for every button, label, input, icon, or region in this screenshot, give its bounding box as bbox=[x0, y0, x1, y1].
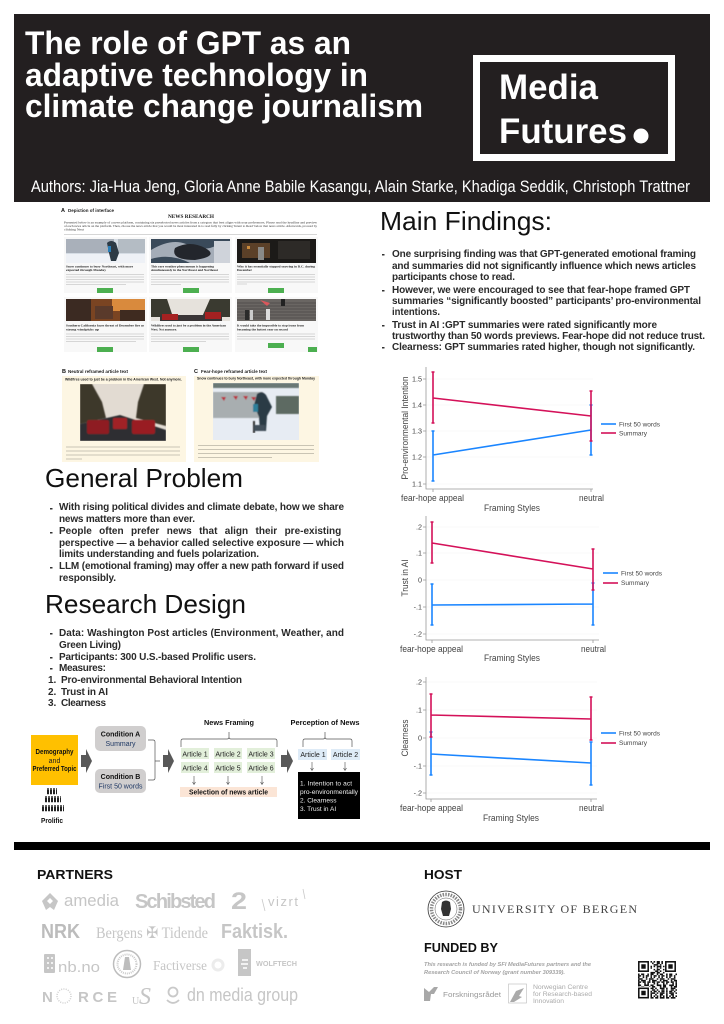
chart: clearness: fear-hope appeal bbox=[400, 803, 463, 813]
logo: University of Bergen bbox=[428, 891, 637, 927]
card headlines: becoming the hottest year on record bbox=[237, 328, 288, 332]
text block: general problem bullets: responsibly. bbox=[59, 573, 116, 584]
card headlines: simultaneously in the Northwest and Northeast bbox=[151, 268, 219, 272]
card headlines: strong windpicks up bbox=[66, 328, 99, 332]
logo: Norwegian Centre for Research-based Innovation: Innovation bbox=[533, 998, 565, 1005]
chart: clearness: .1 bbox=[416, 706, 422, 714]
logo: Norwegian Centre for Research-based Innovation: for Research-based bbox=[533, 991, 593, 998]
label: Prolific: Prolific bbox=[41, 818, 63, 825]
figure C: fear-hope reframed article: C bbox=[194, 369, 198, 375]
text block: general problem bullets bbox=[50, 502, 344, 584]
image: snow shoveller bbox=[66, 239, 145, 263]
figure C: fear-hope reframed article bbox=[194, 369, 319, 462]
title: adaptive technology in bbox=[25, 57, 368, 93]
card headlines: December bbox=[237, 268, 253, 272]
box: condition B: Condition B bbox=[101, 774, 140, 781]
chart: trust in AI: Framing Styles bbox=[484, 653, 541, 663]
image: fire trucks on road bbox=[80, 384, 166, 441]
text block: general problem bullets: limits understanding and fuels polarization. bbox=[59, 549, 259, 560]
figure B: neutral reframed article bbox=[62, 369, 186, 462]
logo: University of Bergen: UNIVERSITY OF BERGEN bbox=[472, 902, 637, 916]
logo: university seal bbox=[114, 950, 140, 978]
logo: Forskningsrådet bbox=[424, 987, 502, 1001]
card headlines: Snow continues to bury Northeast, with more bbox=[66, 264, 133, 268]
figure A: depiction of interface: A bbox=[61, 208, 65, 214]
chart: pro-environmental intention: Pro-environmental Intention bbox=[400, 376, 410, 480]
text block: main findings bullets: trustworthy than 50 words previews. Fear-hope did not reduce trust. bbox=[392, 331, 705, 342]
title: The role of GPT as an bbox=[25, 25, 351, 61]
figure C: fear-hope reframed article: Snow continues to bury Northeast, with more expected through Monday bbox=[197, 376, 316, 380]
box: demography and preferred topic bbox=[31, 735, 78, 785]
card headlines: It would take the impossible to stop irony from bbox=[237, 324, 304, 328]
logo: Bergens Tidende: Bergens ✠ Tidende bbox=[96, 925, 208, 942]
chart: trust in AI: -.1 bbox=[414, 602, 422, 612]
chart: pro-environmental intention: 1.1 bbox=[412, 480, 422, 488]
legend bbox=[601, 422, 660, 438]
chart: pro-environmental intention bbox=[400, 367, 660, 513]
chart: clearness: Framing Styles bbox=[483, 813, 540, 823]
logo: Wolftech bbox=[238, 949, 297, 976]
article grid: Article 1 bbox=[182, 752, 208, 758]
heading: General Problem: General Problem bbox=[45, 463, 243, 493]
logo: Forskningsrådet: Forskningsrådet bbox=[443, 990, 502, 999]
box: demography and preferred topic: and bbox=[49, 758, 60, 765]
chart: clearness: Clearness bbox=[400, 719, 410, 756]
box: selection of news article: Selection of news article bbox=[189, 790, 268, 796]
text block: main findings bullets: One surprising finding was that GPT-generated emotional framing bbox=[392, 249, 696, 260]
card headlines: Wildfires used to just be a problem in the American bbox=[151, 324, 226, 328]
article grid: Article 5 bbox=[215, 766, 241, 772]
image: fire trucks bbox=[151, 299, 230, 321]
logo: vizrt bbox=[262, 889, 305, 911]
logo: TV 2: 2 bbox=[231, 888, 247, 915]
heading: Main Findings: Main Findings: bbox=[380, 206, 552, 236]
legend bbox=[601, 730, 660, 747]
figure A: depiction of interface: Depiction of interface bbox=[68, 208, 114, 214]
logo: dn media group: dn media group bbox=[187, 985, 298, 1005]
card headlines: Southern California faces threat of December fire as bbox=[66, 324, 145, 328]
text block: research design list: Pro-environmental Behavioral Intention bbox=[61, 675, 242, 686]
perception articles bbox=[298, 749, 360, 760]
text block: general problem bullets: LLM (emotional framing) may offer a new path forward if used bbox=[59, 561, 344, 572]
arrow: to perception bbox=[281, 749, 293, 773]
text block: research design list: 2. bbox=[48, 687, 57, 698]
logo: Wolftech: WOLFTECH bbox=[256, 959, 297, 968]
logo: UiS: S bbox=[139, 984, 151, 1010]
image: person shovelling snow bbox=[213, 383, 299, 440]
logo: NORCE: RCE bbox=[78, 989, 117, 1006]
logo: nb.no: nb.no bbox=[58, 959, 100, 976]
chart: clearness: -.2 bbox=[414, 788, 422, 798]
legend: Summary bbox=[619, 430, 648, 438]
logo: Media Futures bbox=[476, 58, 672, 158]
text block: research design list: Data: Washington Post articles (Environment, Weather, and bbox=[59, 628, 344, 639]
box: condition B: First 50 words bbox=[99, 784, 143, 790]
funding statement: Research Council of Norway (grant number 309339). bbox=[424, 970, 565, 976]
chart: pro-environmental intention: 1.4 bbox=[412, 400, 422, 410]
perception articles: Article 1 bbox=[300, 752, 326, 759]
text block: research design list: Clearness bbox=[61, 698, 106, 709]
text block: main findings bullets: However, we were encouraged to see that fear-hope framed GPT bbox=[392, 285, 690, 296]
logo: NORCE: N bbox=[42, 989, 53, 1006]
logo: nb.no bbox=[44, 954, 100, 976]
title bbox=[25, 25, 423, 124]
heading: Research Design: Research Design bbox=[45, 589, 246, 619]
logo: vizrt: vizrt bbox=[268, 894, 298, 909]
figure A: depiction of interface: Presented below is an example of a news platform, containing six preselected news articles from a category that best aligns with your preferences. Please read the headline and preview bbox=[64, 220, 318, 226]
article grid: Article 6 bbox=[248, 766, 274, 772]
chart: trust in AI: neutral bbox=[581, 644, 606, 654]
text block: general problem bullets: People often prefer news that align their pre-existing bbox=[59, 526, 341, 537]
chart: clearness: neutral bbox=[579, 803, 604, 813]
article cards bbox=[64, 237, 318, 352]
perception articles: Article 2 bbox=[333, 752, 358, 759]
legend: First 50 words bbox=[621, 570, 662, 578]
logo: amedia: amedia bbox=[64, 891, 120, 910]
logo: Norwegian Centre for Research-based Innovation: Norwegian Centre bbox=[533, 984, 589, 991]
chart: clearness: .2 bbox=[416, 678, 422, 686]
box: outcome measures: 2. Clearness bbox=[300, 798, 337, 804]
text block: general problem bullets: perspective — a behavior called selective exposure — which bbox=[59, 538, 344, 549]
funding statement bbox=[424, 962, 592, 976]
chart: clearness bbox=[400, 677, 660, 823]
logo: Media Futures: Futures bbox=[499, 112, 627, 151]
chart: pro-environmental intention: fear-hope appeal bbox=[401, 493, 464, 503]
article grid: Article 2 bbox=[215, 752, 241, 758]
image: wildfire bbox=[66, 299, 145, 321]
chart: trust in AI: fear-hope appeal bbox=[400, 644, 463, 654]
text block: general problem bullets: news matters more than ever. bbox=[59, 514, 195, 525]
text block: main findings bullets: participants chose to read. bbox=[392, 272, 515, 283]
box: selection of news article bbox=[180, 787, 277, 797]
logo: Faktisk: Faktisk. bbox=[221, 921, 288, 943]
logo: NRK: NRK bbox=[41, 921, 80, 943]
card headlines: Why it has essentially stopped snowing in D.C. during bbox=[237, 264, 315, 268]
text block: research design list: 3. bbox=[48, 698, 57, 709]
figure B: neutral reframed article: B bbox=[62, 369, 66, 375]
box: outcome measures bbox=[298, 772, 360, 819]
card headlines: expected through Monday bbox=[66, 268, 106, 272]
chart: pro-environmental intention: 1.2 bbox=[412, 452, 422, 462]
logo: UiS bbox=[132, 984, 151, 1010]
read buttons bbox=[97, 288, 317, 352]
header banner bbox=[14, 14, 710, 202]
article grid: Article 3 bbox=[248, 752, 274, 758]
QR code bbox=[638, 961, 677, 999]
chart: trust in AI: Trust in AI bbox=[400, 560, 410, 596]
text block: research design list: 1. bbox=[48, 675, 57, 686]
figure A: depiction of interface: NEWS RESEARCH bbox=[168, 214, 215, 220]
text block: main findings bullets: and summaries did not significantly influence which news articles bbox=[392, 261, 696, 272]
figure B: neutral reframed article: Wildfires used to just be a problem in the American West. Not anymore. bbox=[65, 378, 182, 382]
image: steps with umbrella bbox=[237, 299, 316, 321]
partner logos bbox=[41, 888, 305, 1010]
logo: Norwegian Centre for Research-based Innovation bbox=[508, 984, 593, 1005]
box: condition A bbox=[95, 726, 146, 751]
chart: trust in AI: 0 bbox=[418, 576, 422, 584]
legend: Summary bbox=[619, 740, 648, 747]
text block: research design list: Participants: 300 U.S.-based Prolific users. bbox=[59, 652, 256, 663]
text block: main findings bullets bbox=[382, 249, 705, 353]
box: demography and preferred topic: Demography bbox=[36, 749, 74, 756]
chart: trust in AI bbox=[400, 516, 662, 663]
heading: partners: PARTNERS bbox=[37, 867, 113, 882]
legend bbox=[603, 570, 662, 587]
card headlines bbox=[66, 264, 315, 332]
text block: research design list: Trust in AI bbox=[61, 687, 108, 698]
legend: First 50 words bbox=[619, 730, 660, 738]
research design flow diagram bbox=[31, 720, 360, 825]
chart: pro-environmental intention: neutral bbox=[579, 493, 604, 503]
box: condition A: Summary bbox=[106, 741, 136, 748]
text block: main findings bullets: Trust in AI :GPT summaries were rated significantly more bbox=[392, 320, 657, 331]
text block: main findings bullets: intentions. bbox=[392, 307, 440, 318]
legend: First 50 words bbox=[619, 422, 660, 428]
chart: trust in AI: .2 bbox=[416, 522, 422, 532]
image: night street bbox=[237, 239, 316, 263]
text block: main findings bullets: Clearness: GPT summaries rated higher, though not significantly. bbox=[392, 342, 695, 353]
logo: NORCE bbox=[42, 989, 117, 1006]
chart: trust in AI: .1 bbox=[416, 548, 422, 558]
chart: clearness: 0 bbox=[418, 734, 422, 742]
icon: crowd of people bbox=[42, 789, 64, 809]
text block: general problem bullets: With rising political divides and climate debate, how we share bbox=[59, 502, 344, 513]
legend: Summary bbox=[621, 580, 650, 587]
text block: research design list: Green Living) bbox=[59, 640, 121, 651]
heading: News Framing: News Framing bbox=[204, 720, 254, 727]
logo: Factiverse: Factiverse bbox=[153, 959, 207, 974]
box: condition B bbox=[95, 769, 146, 793]
arrow: to news framing bbox=[163, 749, 174, 773]
figure C: fear-hope reframed article: Fear-hope reframed article text bbox=[201, 369, 267, 375]
box: outcome measures: pro-environmentally bbox=[300, 789, 359, 796]
logo: Media Futures: Media bbox=[499, 68, 599, 107]
funding statement: This research is funded by SFI MediaFutures partners and the bbox=[424, 962, 592, 968]
heading: Perception of News: Perception of News bbox=[290, 720, 360, 727]
box: demography and preferred topic: Preferred Topic bbox=[32, 766, 77, 773]
text block: research design list: Measures: bbox=[59, 663, 106, 674]
article grid bbox=[181, 748, 275, 773]
box: outcome measures: 3. Trust in AI bbox=[300, 806, 336, 813]
logo: Schibsted: Schibsted bbox=[135, 891, 216, 913]
title: climate change journalism bbox=[25, 88, 423, 124]
figure B: neutral reframed article: Neutral reframed article text bbox=[68, 369, 128, 375]
figure A: depiction of interface: of each news article on the platform. Then, choose the news article that you would be most interested in to read fully by clicking 'Intent to Read' below that news article. Afterwards, proceed by bbox=[64, 224, 318, 229]
card headlines: This rare weather phenomenon is happening bbox=[151, 264, 214, 268]
arrow: to conditions bbox=[81, 749, 92, 773]
figure A: depiction of interface bbox=[14, 206, 710, 1010]
chart: pro-environmental intention: 1.5 bbox=[412, 374, 422, 384]
chart: pro-environmental intention: 1.3 bbox=[412, 426, 422, 436]
logo: UiS: U bbox=[132, 996, 140, 1007]
text block: research design list bbox=[48, 628, 344, 709]
card headlines: West. Not anymore. bbox=[151, 328, 177, 332]
image: storm satellite bbox=[151, 239, 230, 263]
article grid: Article 4 bbox=[182, 766, 208, 772]
heading: host: HOST bbox=[424, 867, 462, 882]
heading: funded by: FUNDED BY bbox=[424, 940, 498, 955]
chart: pro-environmental intention: Framing Styles bbox=[484, 503, 541, 513]
text block: main findings bullets: summaries “significantly boosted” participants’ pro-environmental bbox=[392, 296, 701, 307]
chart: trust in AI: -.2 bbox=[414, 630, 422, 638]
chart: clearness: -.1 bbox=[414, 762, 422, 770]
box: outcome measures: 1. Intention to act bbox=[300, 780, 352, 788]
figure A: depiction of interface: clicking Next bbox=[64, 228, 84, 232]
box: condition A: Condition A bbox=[101, 732, 140, 738]
